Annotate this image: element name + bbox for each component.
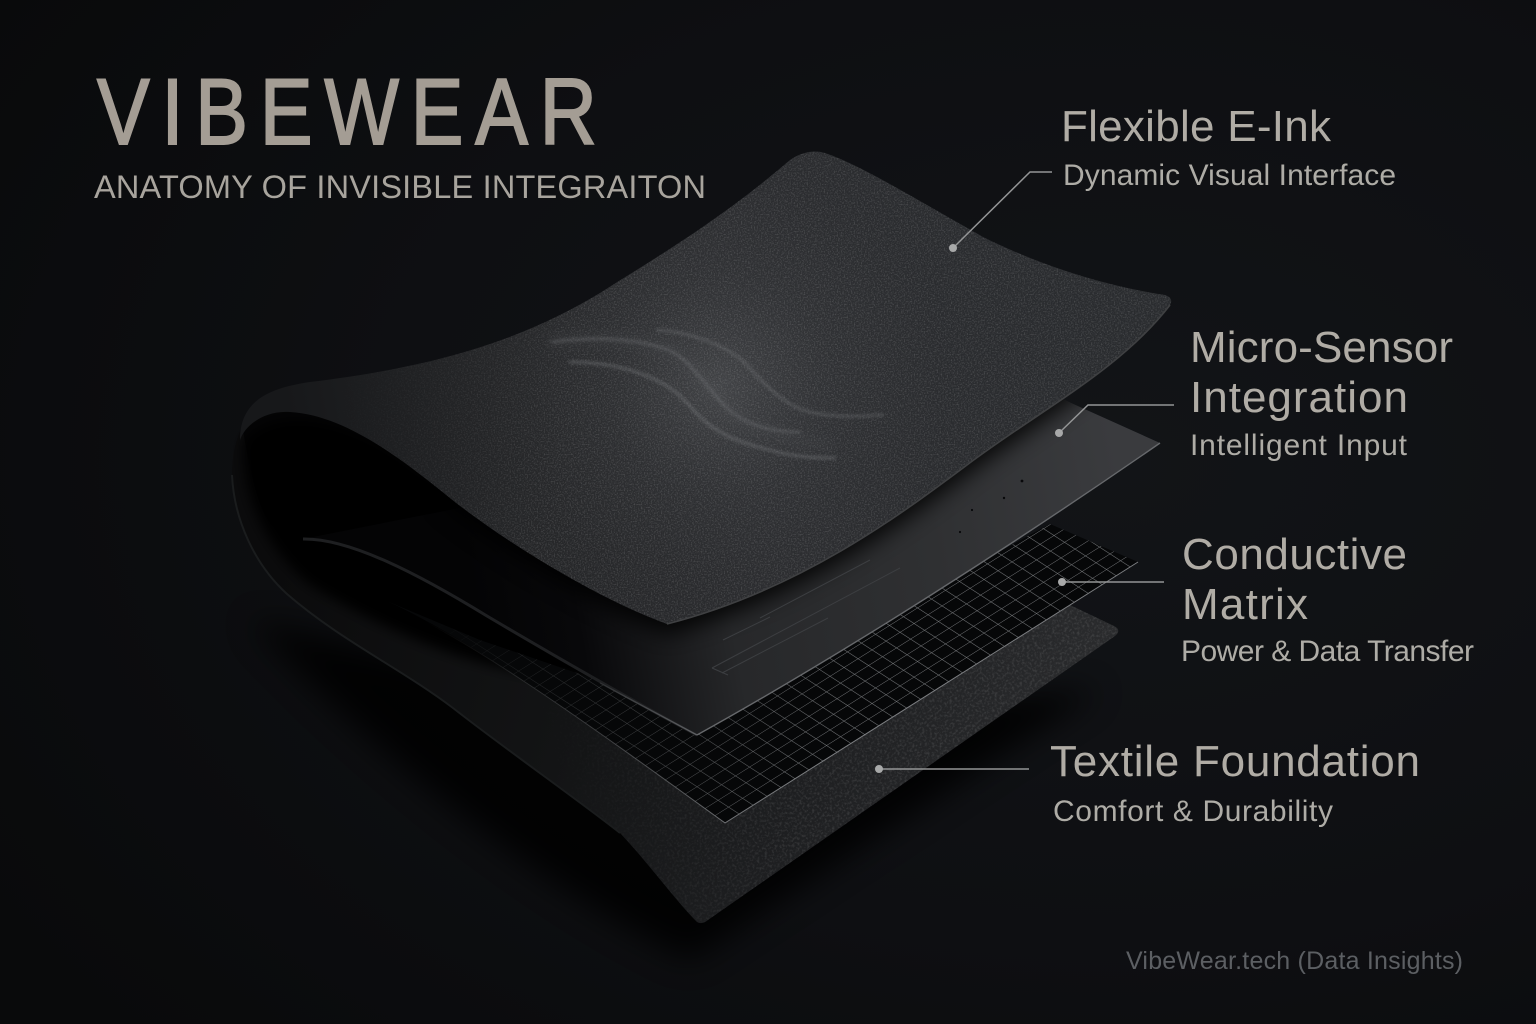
label heading: Conductive xyxy=(1182,530,1407,579)
sensor pin holes xyxy=(959,480,1023,533)
label heading xyxy=(1190,323,1453,422)
title: VIBEWEAR xyxy=(97,60,597,165)
anchor dot xyxy=(949,244,957,252)
label heading xyxy=(1182,530,1407,629)
label description: Dynamic Visual Interface xyxy=(1063,159,1396,192)
layer: micro-sensor sheet xyxy=(303,400,1160,736)
callout: micro-sensor integration xyxy=(1055,323,1453,462)
layer: conductive matrix xyxy=(438,524,1138,824)
footer credit: VibeWear.tech (Data Insights) xyxy=(1126,947,1463,975)
anchor dot xyxy=(1055,429,1063,437)
callout: flexible e-ink xyxy=(949,102,1396,252)
label description: Intelligent Input xyxy=(1190,429,1408,462)
gesture wave highlight xyxy=(552,330,883,458)
label heading: Flexible E-Ink xyxy=(1061,102,1332,151)
sensor traces xyxy=(712,560,900,675)
leader line xyxy=(879,768,1029,770)
label heading: Textile Foundation xyxy=(1050,737,1420,786)
label heading: Integration xyxy=(1190,373,1408,422)
label description: Comfort & Durability xyxy=(1053,795,1333,828)
anchor dot xyxy=(875,765,883,773)
callout: textile foundation xyxy=(875,737,1420,828)
subtitle: ANATOMY OF INVISIBLE INTEGRAITON xyxy=(94,169,706,205)
anchor dot xyxy=(1058,578,1066,586)
label heading: Micro-Sensor xyxy=(1190,323,1453,372)
leader line xyxy=(953,172,1052,248)
layer: textile foundation xyxy=(231,475,1118,923)
cast shadow under stack xyxy=(250,620,1100,960)
illustration: layered fabric stack xyxy=(232,152,1200,960)
layer: flexible e-ink top sheet xyxy=(240,152,1171,624)
label description: Power & Data Transfer xyxy=(1181,635,1474,668)
leader line xyxy=(1059,405,1174,433)
shadow from top sheet xyxy=(576,400,1081,636)
callout: conductive matrix xyxy=(1058,530,1474,668)
fold inner shadow xyxy=(244,419,700,680)
fold interior xyxy=(243,409,700,735)
label heading: Matrix xyxy=(1182,580,1308,629)
leader line xyxy=(1062,581,1164,583)
